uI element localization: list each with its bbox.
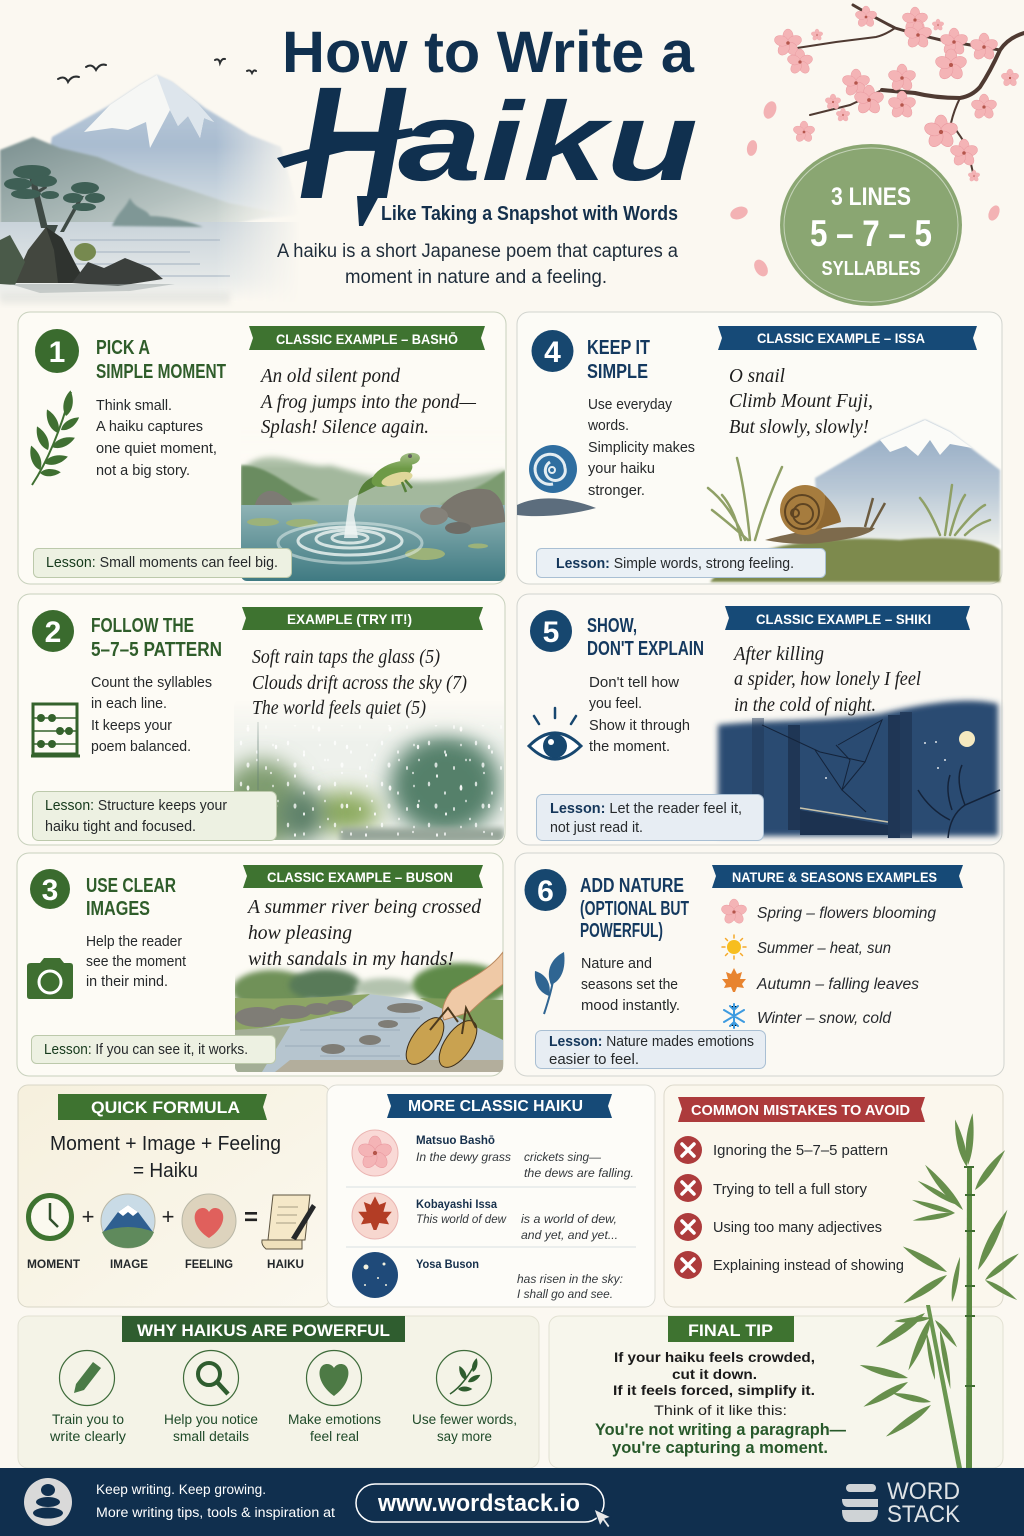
panel: why haikus are powerful	[18, 1316, 539, 1468]
poem: The world feels quiet (5)	[252, 697, 426, 719]
badge: 3 lines 5-7-5 syllables: 5 – 7 – 5	[810, 213, 932, 254]
haiku: Issa: This world of dew	[416, 1214, 507, 1226]
tip text: cut it down.	[672, 1366, 757, 1382]
haiku: Issa: is a world of dew,	[521, 1214, 617, 1226]
icon: camera	[27, 958, 73, 999]
poem	[252, 646, 467, 719]
season text: summer: Summer – heat, sun	[757, 940, 891, 957]
haiku: Issa: Kobayashi Issa	[416, 1199, 498, 1211]
poem: Clouds drift across the sky (7)	[252, 672, 467, 694]
body text: in each line.	[91, 696, 167, 712]
footer text: Keep writing. Keep growing.	[96, 1482, 266, 1497]
ribbon: quick formula: QUICK FORMULA	[91, 1098, 240, 1117]
illustration: mountain, lake and trees	[0, 59, 300, 304]
mistake 4	[674, 1251, 904, 1279]
icon: blossom	[352, 1130, 398, 1176]
ribbon: quick formula	[58, 1094, 267, 1120]
haiku: Basho: crickets sing—	[524, 1152, 602, 1164]
heading	[96, 337, 226, 383]
operator: =	[244, 1204, 258, 1231]
season text: winter: Winter – snow, cold	[757, 1010, 892, 1027]
number badge 4: 4	[544, 336, 561, 369]
body text	[96, 398, 217, 479]
ribbon: classic example Buson: CLASSIC EXAMPLE – BUSON	[267, 869, 453, 885]
item: heart: Make emotions	[288, 1412, 381, 1427]
number badge 1: 1	[49, 336, 65, 369]
lesson box: easier to feel.	[549, 1052, 639, 1068]
poem	[246, 896, 482, 970]
panel: step 4 keep it simple	[517, 312, 1002, 584]
icons: birds	[58, 59, 256, 82]
body text: your haiku	[588, 461, 655, 477]
heading: (OPTIONAL BUT	[580, 898, 689, 920]
body text: Show it through	[589, 718, 690, 734]
poem: After killing	[732, 643, 824, 665]
heading: DON'T EXPLAIN	[587, 638, 704, 660]
heading: USE CLEAR	[86, 875, 176, 897]
lesson box: haiku tight and focused.	[45, 819, 196, 835]
ribbon: common mistakes to avoid	[678, 1097, 925, 1122]
closing statement	[595, 1421, 846, 1457]
haiku: Issa: and yet, and yet...	[521, 1230, 618, 1242]
poem	[729, 365, 873, 438]
poem: A frog jumps into the pond—	[259, 391, 476, 413]
number badge 4	[532, 330, 574, 372]
panel: final tip	[549, 1316, 1003, 1468]
icon: leafy sprig	[27, 390, 81, 485]
body text: see the moment	[86, 954, 186, 970]
heading: SIMPLE	[587, 361, 648, 383]
formula text: Moment + Image + Feeling	[50, 1133, 281, 1155]
ribbon: nature and seasons examples: NATURE & SEASONS EXAMPLES	[732, 869, 937, 885]
lesson box	[536, 1030, 766, 1068]
body text: Use everyday	[588, 397, 673, 413]
ribbon: example try it	[242, 607, 483, 630]
panel: more classic haiku	[327, 1085, 655, 1307]
heading	[91, 615, 222, 661]
lesson box	[536, 548, 826, 578]
heading: FOLLOW THE	[91, 615, 194, 637]
number badge 5	[530, 610, 572, 652]
icon labels	[27, 1257, 304, 1271]
item: pencil: write clearly	[49, 1429, 126, 1444]
illustration: bamboo	[859, 1113, 1021, 1468]
panel: step 6 add nature	[515, 853, 1004, 1076]
heading	[587, 337, 650, 383]
heading	[580, 875, 689, 942]
panel: common mistakes	[664, 1085, 1003, 1307]
heading: 5–7–5 PATTERN	[91, 639, 222, 661]
icon labels: IMAGE	[110, 1257, 148, 1271]
haiku: Basho: the dews are falling.	[524, 1168, 634, 1180]
icon labels: FEELING	[185, 1257, 233, 1271]
illustration: rain on window	[234, 718, 504, 840]
tip text: If it feels forced, simplify it.	[613, 1382, 815, 1398]
icon: blue spiral shell	[517, 445, 596, 516]
panel: step 5 show don't explain	[517, 594, 1002, 845]
ribbon: final tip	[668, 1316, 794, 1342]
icon: maple leaf	[352, 1193, 398, 1239]
haiku: Buson: I shall go and see.	[517, 1289, 613, 1301]
number badge 3: 3	[42, 874, 58, 907]
poem	[259, 365, 476, 438]
body text	[86, 934, 186, 990]
ribbon: more classic haiku: MORE CLASSIC HAIKU	[408, 1098, 583, 1115]
item: magnifier: Help you notice	[164, 1412, 258, 1427]
body text	[589, 675, 690, 755]
body text: poem balanced.	[91, 739, 191, 755]
badge: 3 lines 5-7-5 syllables: SYLLABLES	[822, 258, 920, 280]
body text: A haiku captures	[96, 419, 203, 435]
body text	[587, 397, 695, 499]
body text: one quiet moment,	[96, 441, 217, 457]
title: Haiku brush lettering	[277, 53, 698, 232]
item: pencil: Train you to	[52, 1412, 124, 1427]
lesson box	[34, 548, 292, 578]
body text: Don't tell how	[589, 675, 680, 691]
logo: word stack: STACK	[887, 1501, 960, 1528]
poem: Splash! Silence again.	[261, 416, 429, 438]
illustration: cherry blossom branch	[728, 5, 1024, 279]
poem: An old silent pond	[259, 365, 401, 387]
mistake 1	[674, 1136, 888, 1164]
lesson box	[536, 794, 764, 840]
heading: SHOW,	[587, 615, 637, 637]
logo: word stack: WORD	[887, 1478, 960, 1505]
heading: PICK A	[96, 337, 150, 359]
closing statement: You're not writing a paragraph—	[595, 1421, 846, 1439]
footer text: More writing tips, tools & inspiration at	[96, 1505, 335, 1520]
heading	[587, 615, 704, 660]
icon: spring flower	[720, 899, 748, 925]
mistake 2	[674, 1174, 868, 1202]
panel: step 1 pick a simple moment	[18, 312, 506, 584]
body text: the moment.	[589, 739, 670, 755]
ribbon: classic example Shiki	[725, 606, 970, 630]
item: sprig	[412, 1350, 517, 1444]
body text	[581, 956, 680, 1014]
heading: SIMPLE MOMENT	[96, 361, 226, 383]
haiku: Basho: In the dewy grass	[416, 1152, 511, 1164]
body text: Think small.	[96, 398, 172, 414]
lesson box: Lesson: If you can see it, it works.	[44, 1042, 248, 1058]
poem: O snail	[729, 365, 785, 387]
icon labels: MOMENT	[27, 1257, 81, 1271]
body text: words.	[587, 418, 629, 434]
poem: A summer river being crossed	[246, 896, 482, 918]
poem: with sandals in my hands!	[248, 948, 454, 970]
badge: 3 lines 5-7-5 syllables	[780, 144, 962, 306]
ribbon: why haikus are powerful: WHY HAIKUS ARE POWERFUL	[137, 1321, 390, 1340]
heading: IMAGES	[86, 898, 150, 920]
icon: starry sky	[352, 1252, 398, 1298]
body text: Simplicity makes	[588, 440, 695, 456]
number badge 6	[524, 869, 566, 911]
ribbon: why haikus are powerful	[122, 1316, 405, 1342]
intro text: moment in nature and a feeling.	[345, 267, 607, 288]
icon: eye	[529, 708, 581, 759]
ribbon: nature and seasons examples	[712, 865, 963, 888]
lesson box: Lesson: Small moments can feel big.	[46, 555, 278, 571]
number badge 2	[32, 610, 74, 652]
item: magnifier	[164, 1350, 258, 1444]
number badge 2: 2	[45, 616, 61, 649]
lesson box: not just read it.	[550, 820, 643, 836]
ribbon: classic example Shiki: CLASSIC EXAMPLE – SHIKI	[756, 611, 931, 627]
illustration: snail and Mount Fuji	[708, 420, 1000, 582]
ribbon: classic example Issa	[718, 326, 977, 350]
haiku: Basho: Matsuo Bashō	[416, 1135, 495, 1147]
mistake 3	[674, 1213, 882, 1241]
body text: seasons set the	[581, 977, 678, 993]
ribbon: classic example Buson	[243, 865, 483, 888]
ribbon: final tip: FINAL TIP	[688, 1321, 773, 1340]
badge: 3 lines 5-7-5 syllables: 3 LINES	[831, 183, 911, 211]
closing statement: you're capturing a moment.	[612, 1439, 828, 1457]
operator: +	[162, 1204, 174, 1229]
poem: in the cold of night.	[734, 694, 876, 716]
heading: ADD NATURE	[580, 875, 684, 897]
heading: KEEP IT	[587, 337, 650, 359]
body text: you feel.	[589, 696, 642, 712]
haiku: Buson: has risen in the sky:	[517, 1274, 623, 1286]
ribbon: classic example Basho: CLASSIC EXAMPLE – BASHŌ	[276, 330, 458, 347]
heading	[86, 875, 176, 920]
body text: Help the reader	[86, 934, 182, 950]
illustration: night window with spider web	[718, 701, 1000, 838]
lesson box	[32, 792, 276, 840]
intro text	[277, 241, 678, 288]
body text: It keeps your	[91, 718, 172, 734]
poem: Soft rain taps the glass (5)	[252, 646, 440, 668]
poem: But slowly, slowly!	[729, 416, 869, 438]
ribbon: classic example Issa: CLASSIC EXAMPLE – ISSA	[757, 330, 925, 346]
title: Haiku brush lettering: H	[298, 53, 407, 232]
haiku: Buson: Yosa Buson	[416, 1259, 479, 1271]
item: pencil	[49, 1350, 126, 1444]
ribbon: more classic haiku	[387, 1094, 612, 1118]
icons: falling petals	[728, 99, 1002, 279]
item: heart	[288, 1350, 381, 1444]
logo: word stack	[842, 1478, 960, 1528]
title: How to Write a: How to Write a	[282, 20, 695, 85]
operator: +	[82, 1204, 94, 1229]
footer bar	[0, 1468, 1024, 1536]
think line: Think of it like this:	[654, 1402, 787, 1418]
illustration: frog jumping into pond	[241, 452, 505, 581]
lesson box	[32, 1036, 276, 1064]
body text: Count the syllables	[91, 675, 212, 691]
mistake 3: Using too many adjectives	[713, 1220, 882, 1236]
tip text	[613, 1349, 815, 1398]
icon: winter snowflake	[724, 1004, 744, 1028]
website pill: www.wordstack.io	[377, 1490, 580, 1517]
poem: how pleasing	[248, 922, 352, 944]
heading: POWERFUL)	[580, 920, 663, 942]
haiku: Basho	[416, 1135, 634, 1180]
poem: Climb Mount Fuji,	[729, 390, 873, 412]
poem	[732, 643, 921, 716]
number badge 5: 5	[543, 616, 559, 649]
icon labels: HAIKU	[267, 1257, 304, 1271]
icon: summer sun	[722, 935, 746, 959]
illustration: river and sandals	[232, 952, 508, 1074]
ribbon: example try it: EXAMPLE (TRY IT!)	[287, 611, 412, 627]
body text: not a big story.	[96, 463, 190, 479]
haiku: Buson	[416, 1259, 623, 1301]
formula text	[50, 1133, 281, 1182]
number badge 3	[30, 869, 70, 909]
lesson box: Lesson: Structure keeps your	[45, 798, 227, 814]
panel: step 2 follow the pattern	[18, 594, 505, 850]
item: sprig: Use fewer words,	[412, 1412, 517, 1427]
icon: clock	[28, 1196, 72, 1238]
body text: in their mind.	[86, 974, 168, 990]
poem: a spider, how lonely I feel	[734, 668, 921, 690]
title: Haiku brush lettering: aiku	[398, 79, 698, 204]
icon: mountain image	[101, 1194, 155, 1248]
mistake 1: Ignoring the 5–7–5 pattern	[713, 1143, 888, 1159]
season text: spring: Spring – flowers blooming	[757, 905, 936, 922]
icon: heart	[182, 1194, 236, 1248]
panel: quick formula	[18, 1085, 330, 1307]
icon: scroll and pen	[262, 1195, 316, 1249]
formula text: = Haiku	[133, 1160, 198, 1182]
intro text: A haiku is a short Japanese poem that captures a	[277, 241, 678, 262]
number badge 1	[35, 329, 79, 373]
body text: mood instantly.	[581, 998, 680, 1014]
mistake 2: Trying to tell a full story	[713, 1182, 868, 1198]
body text	[91, 675, 212, 755]
ribbon: common mistakes to avoid: COMMON MISTAKES TO AVOID	[691, 1102, 910, 1119]
footer text	[96, 1482, 335, 1520]
icon: stones	[24, 1478, 72, 1526]
lesson box: Lesson: Simple words, strong feeling.	[556, 556, 794, 572]
ribbon: classic example Basho	[249, 326, 485, 350]
haiku: Issa	[416, 1199, 618, 1242]
lesson box: Lesson: Let the reader feel it,	[550, 801, 742, 817]
mistake 4: Explaining instead of showing	[713, 1258, 904, 1274]
item: sprig: say more	[437, 1429, 492, 1444]
body text: stronger.	[588, 483, 645, 499]
item: magnifier: small details	[173, 1429, 249, 1444]
panel: step 3 use clear images	[17, 853, 508, 1076]
icon: autumn leaf	[722, 968, 746, 992]
subtitle: Like Taking a Snapshot with Words	[381, 203, 678, 225]
body text: Nature and	[581, 956, 652, 972]
icon: cursor	[594, 1509, 611, 1528]
number badge 6: 6	[537, 875, 554, 908]
tip text: If your haiku feels crowded,	[614, 1349, 815, 1365]
icon: blue leaves	[535, 952, 564, 1014]
website pill	[356, 1484, 604, 1522]
item: heart: feel real	[310, 1429, 359, 1444]
icon: abacus	[31, 704, 80, 756]
season text: autumn: Autumn – falling leaves	[756, 976, 919, 993]
lesson box: Lesson: Nature mades emotions	[549, 1034, 754, 1050]
